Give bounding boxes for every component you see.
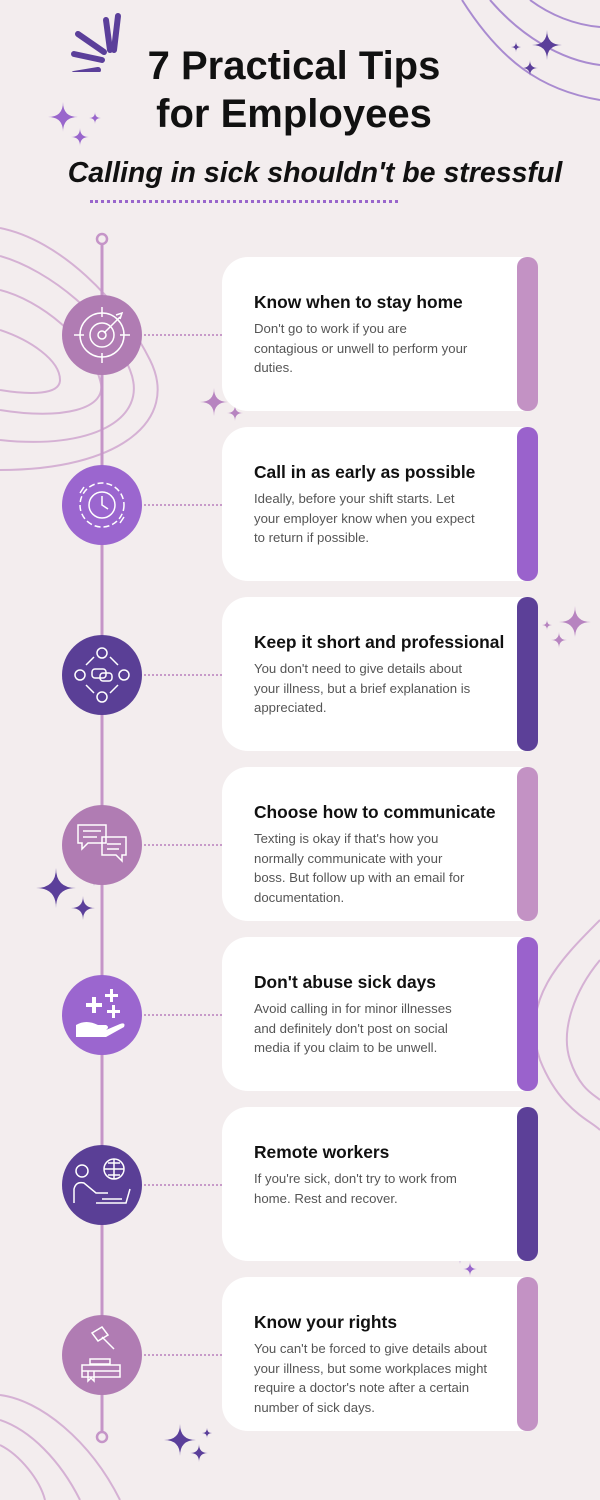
subtitle: Calling in sick shouldn't be stressful [68, 157, 562, 189]
icon: chat bubbles [62, 805, 142, 885]
title: for Employees [156, 92, 432, 136]
text 4: documentation. [254, 890, 344, 905]
text 6 [254, 1171, 457, 1206]
text 3: You don't need to give details about [254, 661, 462, 676]
heading 4: Choose how to communicate [254, 802, 496, 822]
title: 7 Practical Tips [148, 44, 440, 88]
text 5 [254, 1001, 452, 1055]
icon: burst lines [71, 13, 121, 72]
panel: tip 4 [62, 805, 222, 885]
text 1: contagious or unwell to perform your [254, 341, 467, 356]
text 7: your illness, but some workplaces might [254, 1361, 487, 1376]
text 2: your employer know when you expect [254, 511, 475, 526]
text 3: appreciated. [254, 700, 327, 715]
icon: gavel books [62, 1315, 142, 1395]
icon: remote worker [62, 1145, 142, 1225]
text 2 [254, 491, 475, 545]
text 1: Don't go to work if you are [254, 321, 407, 336]
text 2: to return if possible. [254, 530, 369, 545]
heading 5: Don't abuse sick days [254, 972, 436, 992]
panel: tip 3 [62, 635, 222, 715]
panel: tip 7 [62, 1315, 222, 1395]
timeline [96, 232, 108, 1444]
text 3: your illness, but a brief explanation is [254, 681, 470, 696]
heading 2: Call in as early as possible [254, 462, 475, 482]
text 7: number of sick days. [254, 1400, 375, 1415]
text 2: Ideally, before your shift starts. Let [254, 491, 455, 506]
text 7: You can't be forced to give details about [254, 1341, 487, 1356]
text 6: home. Rest and recover. [254, 1191, 398, 1206]
heading 3: Keep it short and professional [254, 632, 504, 652]
panel: tip 1 [62, 295, 222, 375]
text 5: and definitely don't post on social [254, 1021, 448, 1036]
text 3 [254, 661, 470, 715]
heading 1: Know when to stay home [254, 292, 463, 312]
text 6: If you're sick, don't try to work from [254, 1171, 457, 1186]
panel: tip 2 [62, 465, 222, 545]
panel: tip 5 [62, 975, 222, 1055]
text 4 [254, 831, 464, 905]
icon: hand with plus [62, 975, 142, 1055]
icon: target gear [62, 295, 142, 375]
text 5: media if you claim to be unwell. [254, 1040, 437, 1055]
text 1 [254, 321, 468, 375]
heading 6: Remote workers [254, 1142, 389, 1162]
icon: people chat [62, 635, 142, 715]
text 7 [254, 1341, 487, 1415]
heading 7: Know your rights [254, 1312, 397, 1332]
text 1: duties. [254, 360, 293, 375]
text 4: normally communicate with your [254, 851, 442, 866]
text 4: Texting is okay if that's how you [254, 831, 438, 846]
title [148, 44, 440, 136]
icon: clock gear [62, 465, 142, 545]
text 7: require a doctor's note after a certain [254, 1380, 469, 1395]
panel: tip 6 [62, 1145, 222, 1225]
text 5: Avoid calling in for minor illnesses [254, 1001, 452, 1016]
text 4: boss. But follow up with an email for [254, 870, 464, 885]
